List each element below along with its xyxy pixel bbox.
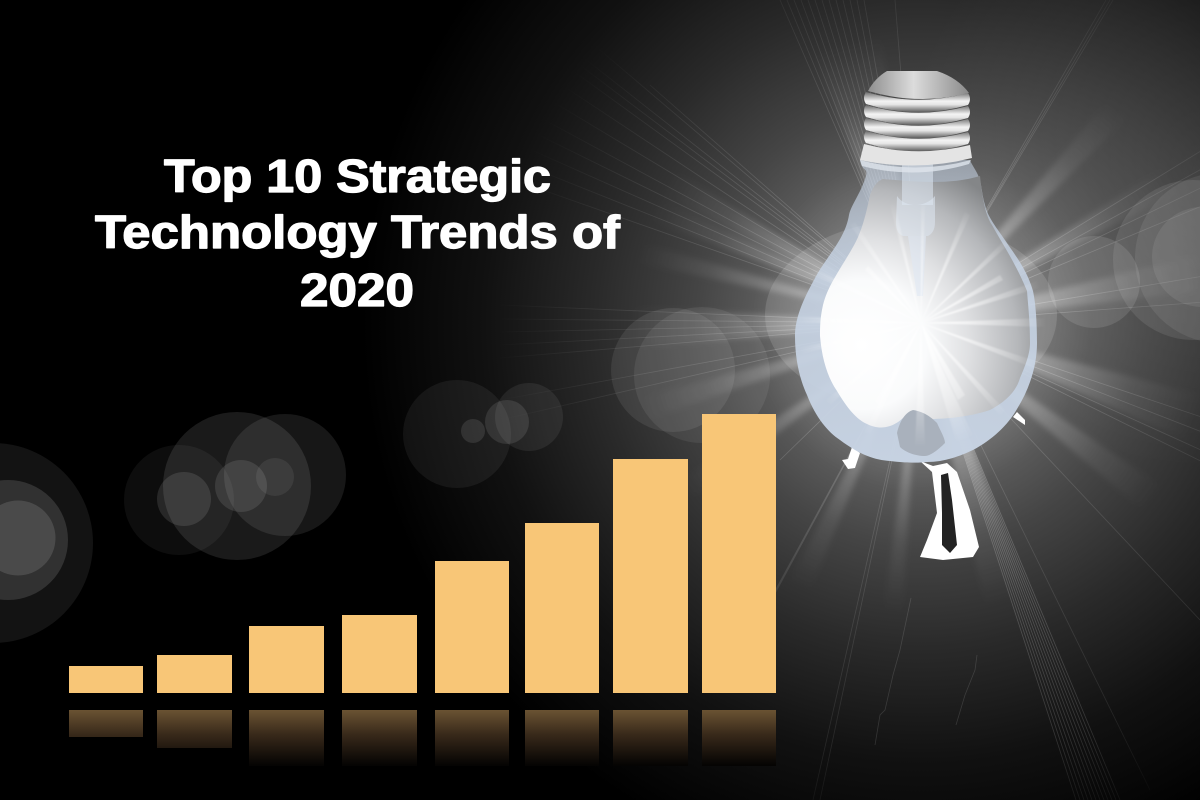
lower grey patch xyxy=(897,410,945,456)
title: Top 10 Strategic xyxy=(164,150,551,202)
title: 2020 xyxy=(300,264,414,316)
faint cracks on the floor xyxy=(875,598,977,745)
bokeh circles: centre left xyxy=(124,412,346,560)
necktie and shirt xyxy=(920,461,979,560)
fine hatched rays xyxy=(500,0,1200,640)
lower right hatched ray band xyxy=(813,323,1200,800)
bar chart xyxy=(69,414,776,693)
cap base ring xyxy=(860,144,972,166)
collar band xyxy=(860,160,971,173)
inner glass reflection xyxy=(820,176,1030,428)
glass bulb xyxy=(795,160,1037,463)
screw threads xyxy=(864,92,970,151)
glow behind bulb xyxy=(751,153,1091,493)
bokeh circles: centre xyxy=(403,380,563,488)
soft light rays xyxy=(500,0,1200,800)
starburst at filament xyxy=(796,203,1046,448)
icon: light bulb figure xyxy=(795,71,1037,560)
figure cuffs xyxy=(842,412,1025,469)
filament stem xyxy=(896,158,935,296)
screw cap top xyxy=(868,71,969,99)
title: Technology Trends of xyxy=(95,206,621,258)
bar reflections xyxy=(69,710,776,766)
bokeh circles: around the bulb xyxy=(611,173,1200,443)
bokeh circles: far left xyxy=(0,443,93,643)
title xyxy=(95,150,621,316)
